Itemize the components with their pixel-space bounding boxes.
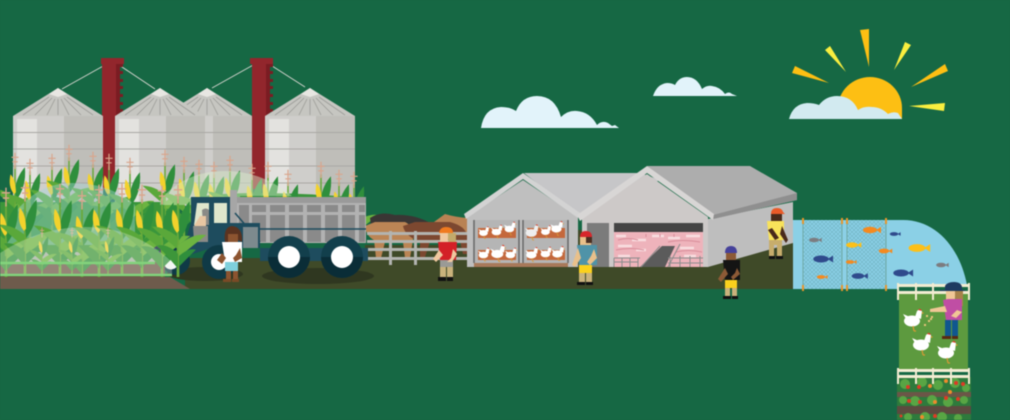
spray arc right: [160, 171, 292, 205]
driver: [193, 208, 209, 242]
sun with rays: [789, 29, 948, 119]
cow: black: [370, 214, 432, 232]
ground: [185, 230, 793, 289]
exhaust pipe: [230, 190, 237, 224]
cow: tan: [365, 222, 413, 258]
farmer by tractor: [217, 226, 242, 282]
ramp: [640, 246, 675, 267]
metal fence: [367, 231, 467, 265]
pond water: [793, 220, 967, 289]
trailer: [237, 197, 366, 243]
chassis: [260, 248, 368, 261]
cattle behind fence: [365, 214, 467, 258]
aquaculture pond: [793, 218, 967, 291]
barn roof: [524, 173, 660, 215]
pig barn: [577, 166, 797, 267]
barn front wall: [467, 180, 578, 267]
cage right: [523, 220, 568, 263]
grain silos: [13, 88, 355, 206]
irrigated seedling bed: [0, 252, 165, 277]
chicken: [912, 333, 933, 355]
barn front wall: [582, 174, 708, 267]
tower right: [250, 58, 273, 189]
tower left: [101, 58, 124, 189]
tractor with trailer: [152, 190, 374, 284]
farmer in black shirt: [718, 246, 740, 299]
wheel rear one: [268, 236, 310, 278]
farmer in yellow shirt: [767, 208, 788, 259]
seedling rows: [0, 263, 172, 275]
cow: light brown: [434, 214, 467, 232]
vegetable garden: [897, 377, 971, 420]
chicken yard: [899, 292, 968, 370]
wheel front: [202, 245, 236, 279]
poultry barn: [464, 173, 660, 267]
corn seedlings: [28, 228, 123, 276]
barn gable trim: [464, 173, 580, 219]
cloud: middle: [653, 77, 737, 96]
barn roof: [647, 166, 797, 219]
cab: [180, 197, 260, 258]
barn side wall: [708, 202, 793, 267]
door: [587, 223, 609, 267]
farmer in red shirt: [433, 227, 457, 281]
cow: brown: [403, 222, 467, 257]
fish: [809, 227, 949, 279]
dirt bank: [0, 277, 190, 289]
spray arc front: [0, 227, 172, 276]
farmer in blue shirt: [572, 231, 597, 285]
grain elevator towers and cables: [62, 58, 305, 189]
yard fence bottom: [897, 368, 970, 384]
cloud: in front of sun: [789, 96, 902, 119]
corn field middle row: [0, 183, 206, 283]
fish net: [803, 218, 886, 291]
corn field back row: [0, 145, 378, 257]
chicken: [937, 341, 958, 363]
farmer in pink shirt with hat: [930, 282, 965, 339]
yard fence top: [897, 283, 970, 300]
cage left: [474, 220, 519, 263]
pig pen opening: [614, 223, 703, 267]
chicken: [903, 309, 924, 331]
wheel in crop: [152, 245, 190, 275]
shadows: [262, 268, 374, 284]
chicken feed: [924, 315, 933, 326]
barn gable trim: [577, 166, 714, 221]
wheel rear two: [321, 236, 363, 278]
radiator grille: [243, 227, 258, 248]
green back area behind buildings: [466, 190, 796, 230]
spray arc back: [5, 183, 135, 245]
cab windows: [194, 203, 227, 225]
cloud: left: [481, 96, 619, 128]
